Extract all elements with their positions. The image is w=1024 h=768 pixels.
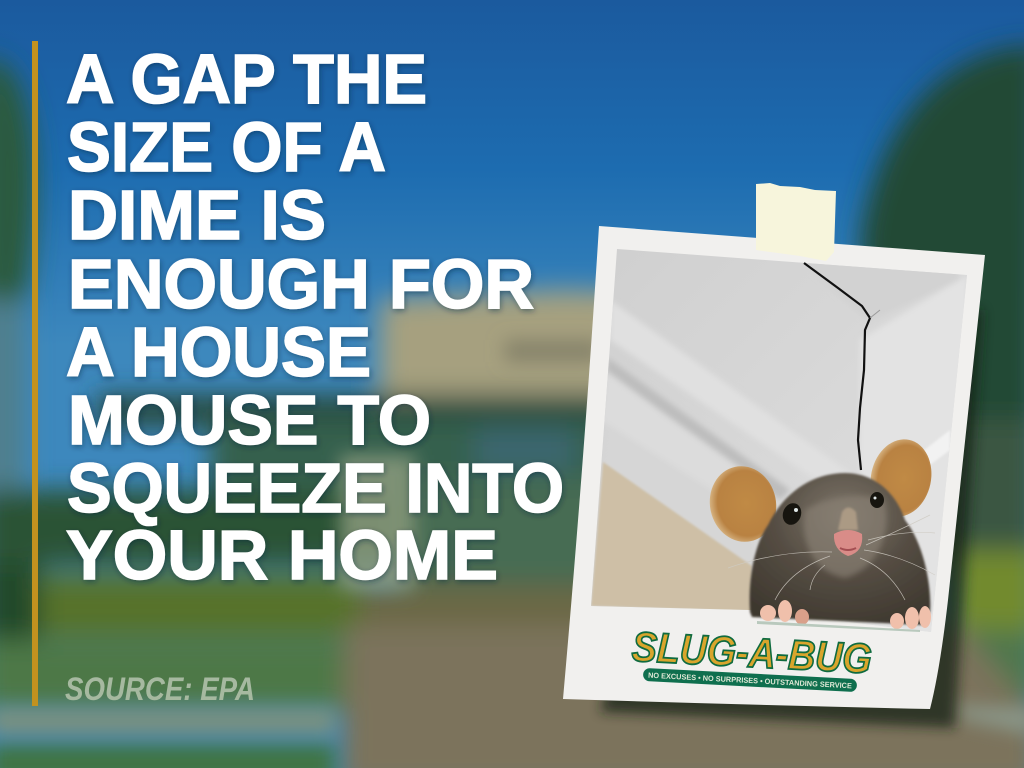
crack <box>804 263 870 470</box>
gold vertical accent bar <box>32 41 38 706</box>
title: a gap the size of a dime: SQUEEZE INTO <box>67 449 564 527</box>
source credit: SOURCE: EPA <box>65 671 255 707</box>
polaroid with mouse photo <box>563 183 986 736</box>
title: a gap the size of a dime: YOUR HOME <box>66 516 498 594</box>
logo: slug-a-bug: SLUG-A-BUG <box>631 623 873 682</box>
photo: cracked ceiling corner <box>580 240 980 640</box>
title: a gap the size of a dime: DIME IS <box>68 176 326 254</box>
title: a gap the size of a dime: SIZE OF A <box>67 108 386 186</box>
tape <box>756 183 836 261</box>
title: a gap the size of a dime: MOUSE TO <box>68 381 431 459</box>
polaroid shadow <box>600 310 982 728</box>
polaroid frame <box>563 226 985 709</box>
title: a gap the size of a dime: A HOUSE <box>66 313 371 391</box>
mouse <box>703 434 938 632</box>
title: a gap the size of a dime: A GAP THE <box>66 40 427 118</box>
title: a gap the size of a dime: ENOUGH FOR <box>68 245 534 323</box>
logo: slug-a-bug: NO EXCUSES • NO SURPRISES • OUTSTANDING SERVICE <box>648 671 852 690</box>
mouse paws <box>760 600 931 629</box>
